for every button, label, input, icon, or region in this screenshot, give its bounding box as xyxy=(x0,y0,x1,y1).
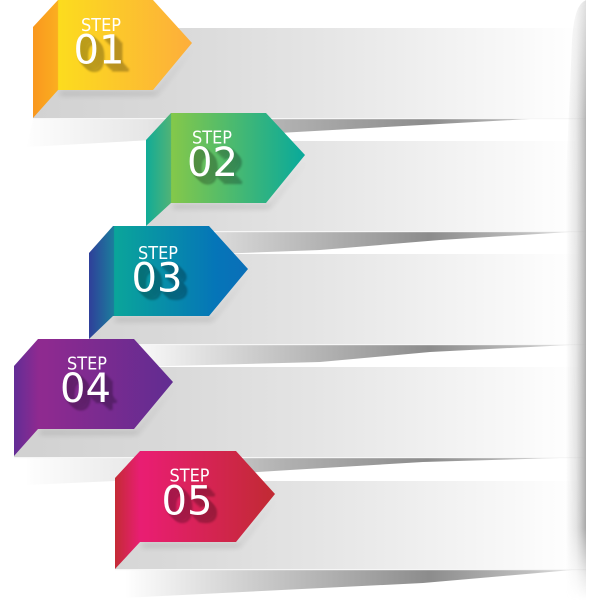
text: step 04: STEP xyxy=(67,354,107,374)
text: step 05: STEP xyxy=(170,466,210,486)
text: step 03: STEP xyxy=(138,244,178,264)
text: step 04: 04 xyxy=(60,366,111,412)
text: step 01: 01 xyxy=(74,28,124,74)
strip shadow wedges xyxy=(27,119,572,598)
text: step 01: STEP xyxy=(81,16,121,36)
text: step 03: 03 xyxy=(132,256,182,302)
step 01 banner xyxy=(33,0,195,118)
text: step 05: 05 xyxy=(162,478,212,524)
step 05 banner xyxy=(115,451,278,569)
text: step 02: 02 xyxy=(187,140,238,186)
right edge page fold xyxy=(568,0,586,591)
step 03 banner xyxy=(89,226,251,339)
step 04 banner xyxy=(14,339,176,456)
step 02 banner xyxy=(146,113,308,226)
strip highlight lines xyxy=(14,118,586,570)
text: step 02: STEP xyxy=(192,128,232,148)
